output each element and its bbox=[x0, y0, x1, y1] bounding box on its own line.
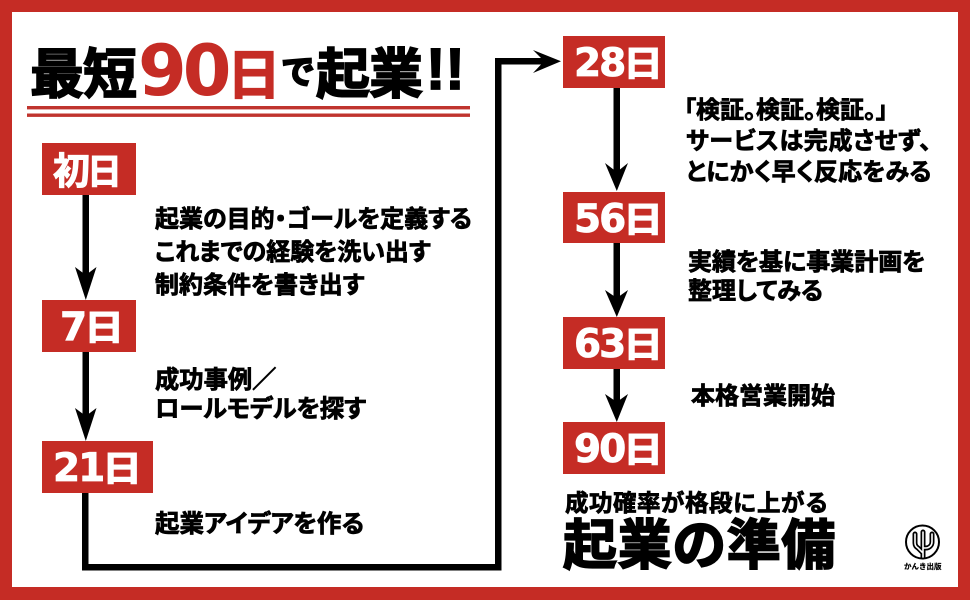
step label: 63日: 日 bbox=[623, 317, 664, 368]
text: day 56 tasks: 実績を基に事業計画を bbox=[688, 242, 925, 277]
arrow: day 21 to day 28 connector bbox=[82, 50, 561, 570]
text: day 1 tasks bbox=[154, 199, 472, 300]
text: day 1 tasks: 制約条件を書き出す bbox=[155, 265, 364, 300]
book title: 起業の準備 bbox=[563, 501, 836, 580]
step label: 初日: 日 bbox=[87, 144, 122, 195]
step label: 28日: 28 bbox=[574, 41, 624, 86]
arrow: day 7 to day 21 bbox=[75, 352, 96, 441]
arrow: day 28 to day 56 bbox=[605, 88, 628, 191]
step label: 28日: 日 bbox=[623, 36, 664, 87]
step label: 56日 bbox=[563, 192, 665, 243]
text: day 7 tasks: 成功事例／ bbox=[155, 360, 276, 395]
step label: 63日 bbox=[563, 317, 665, 369]
text: day 21 task: 起業アイデアを作る bbox=[155, 505, 364, 540]
title: 最短 bbox=[30, 30, 136, 109]
step label: 初日 bbox=[42, 143, 136, 195]
arrow: day 1 to day 7 bbox=[75, 195, 96, 300]
text: day 28 tasks: とにかく早く反応をみる bbox=[686, 152, 932, 187]
text: day 28 tasks: 「検証。検証。検証。」 bbox=[684, 90, 888, 125]
title: !! bbox=[426, 37, 465, 102]
arrow: day 56 to day 63 bbox=[605, 243, 628, 317]
step label: 21日 bbox=[42, 441, 153, 493]
title: 90 bbox=[138, 30, 227, 112]
step label: 初日: 初 bbox=[53, 141, 89, 195]
text: day 7 tasks bbox=[155, 360, 366, 424]
text: day 63 task: 本格営業開始 bbox=[691, 376, 835, 411]
text: day 56 tasks bbox=[688, 242, 925, 306]
step label: 21日: 日 bbox=[102, 441, 143, 492]
step label: 7日 bbox=[42, 300, 136, 352]
step label: 90日 bbox=[563, 422, 665, 474]
title: 起業 bbox=[316, 30, 422, 109]
step label: 90日: 90 bbox=[574, 427, 624, 472]
subtitle: 成功確率が格段に上がる bbox=[565, 484, 829, 518]
text: day 28 tasks bbox=[684, 90, 932, 187]
step label: 90日: 日 bbox=[623, 422, 664, 473]
step label: 56日: 56 bbox=[574, 197, 624, 242]
step label: 56日: 日 bbox=[623, 192, 664, 243]
title bbox=[30, 30, 465, 112]
text: day 1 tasks: 起業の目的・ゴールを定義する bbox=[155, 199, 472, 234]
title: で bbox=[281, 45, 315, 94]
step label: 21日: 21 bbox=[53, 446, 103, 491]
title: 日 bbox=[227, 31, 281, 110]
step label: 63日: 63 bbox=[574, 322, 624, 367]
arrow: day 63 to day 90 bbox=[605, 369, 628, 422]
text: day 1 tasks: これまでの経験を洗い出す bbox=[155, 232, 430, 267]
step label: 7日: 7 bbox=[60, 305, 85, 350]
publisher name: かんき出版 bbox=[904, 561, 942, 572]
text: day 7 tasks: ロールモデルを探す bbox=[155, 389, 366, 424]
step label: 28日 bbox=[563, 36, 665, 88]
text: day 28 tasks: サービスは完成させず、 bbox=[686, 121, 932, 156]
icon: cactus in circle bbox=[905, 524, 940, 560]
publisher logo bbox=[904, 524, 942, 572]
text: day 56 tasks: 整理してみる bbox=[688, 271, 823, 306]
step label: 7日: 日 bbox=[84, 300, 124, 351]
